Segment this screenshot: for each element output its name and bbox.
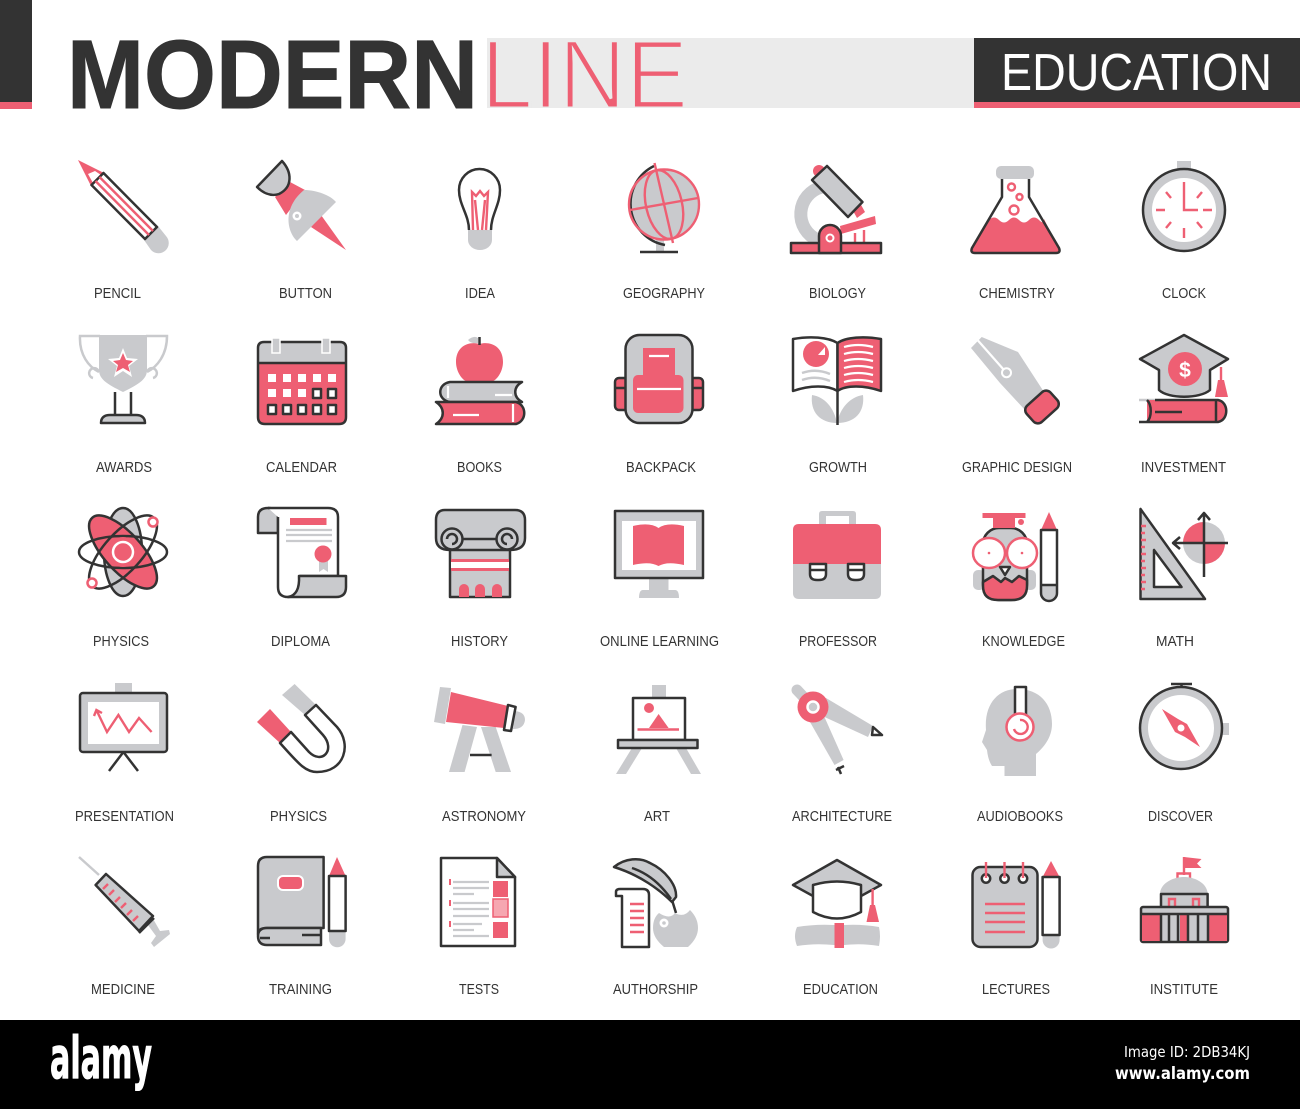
label: investment: INVESTMENT <box>1141 460 1226 476</box>
label: physics magnet: PHYSICS <box>270 809 327 825</box>
footer image id: Image ID: 2DB34KJ <box>1124 1043 1250 1061</box>
label: math: MATH <box>1156 634 1194 650</box>
cell: knowledge <box>973 512 1065 650</box>
icon: atom <box>78 505 168 599</box>
title band with LINE <box>487 38 974 108</box>
cell: awards <box>80 335 167 476</box>
label: medicine: MEDICINE <box>91 982 155 998</box>
cell: growth <box>793 337 881 476</box>
cell: institute <box>1141 857 1228 998</box>
cell: calendar <box>258 338 346 476</box>
icon: stopwatch <box>1143 161 1225 251</box>
cell: physics magnet <box>257 684 345 825</box>
icon: notebook with pencil <box>972 861 1060 948</box>
cell: investment <box>1139 335 1228 476</box>
cell: architecture <box>792 690 892 825</box>
cell: history <box>436 510 525 650</box>
cell: pencil <box>78 160 169 302</box>
icon: trophy <box>80 335 167 423</box>
label: graphic design: GRAPHIC DESIGN <box>962 460 1072 476</box>
icon: telescope <box>434 687 525 772</box>
cell: math <box>1140 509 1228 650</box>
label: clock: CLOCK <box>1162 286 1206 302</box>
label: presentation: PRESENTATION <box>75 809 174 825</box>
cell: authorship <box>613 859 698 998</box>
icon: backpack <box>615 335 703 423</box>
icon: capitol building <box>1141 857 1228 942</box>
icon: briefcase <box>793 511 881 599</box>
label: awards: AWARDS <box>96 460 152 476</box>
label: knowledge: KNOWLEDGE <box>982 634 1065 650</box>
icon: set square and chart <box>1140 509 1228 599</box>
icon: globe <box>629 163 699 252</box>
label: art: ART <box>644 809 670 825</box>
icon: cap and diploma <box>793 860 881 948</box>
icon: monitor with book <box>615 511 703 598</box>
cell: chemistry <box>971 166 1060 302</box>
cell: clock <box>1143 161 1225 302</box>
icon: graduation cap and book: $ <box>1179 359 1191 382</box>
icon: light bulb <box>459 169 500 250</box>
label: physics atom: PHYSICS <box>93 634 149 650</box>
title: MODERN: MODERN <box>67 20 478 129</box>
label: button: BUTTON <box>279 286 332 302</box>
label: pencil: PENCIL <box>94 286 141 302</box>
icon: column <box>436 510 525 597</box>
icon: quill and scroll <box>614 859 698 947</box>
icon: graduation cap and book <box>1139 335 1228 422</box>
icon: magnet <box>257 684 345 772</box>
label: calendar: CALENDAR <box>266 460 337 476</box>
icon: open book with leaves <box>793 337 881 425</box>
cell: physics atom <box>78 505 168 650</box>
header corner block <box>0 0 32 109</box>
label: idea: IDEA <box>465 286 495 302</box>
label: architecture: ARCHITECTURE <box>792 809 892 825</box>
icon: diploma scroll <box>258 508 346 597</box>
label: backpack: BACKPACK <box>626 460 696 476</box>
icon: compass divider <box>797 690 882 774</box>
icon: apple on books <box>436 337 524 424</box>
icon: compass <box>1140 684 1229 769</box>
title band with LINE: LINE <box>481 20 688 129</box>
cell: training <box>258 857 346 998</box>
label: online learning: ONLINE LEARNING <box>600 634 719 650</box>
icon: head with headphones <box>982 687 1052 776</box>
label: authorship: AUTHORSHIP <box>613 982 698 998</box>
cell: lectures <box>972 861 1060 998</box>
icon: calendar <box>258 338 346 424</box>
label: training: TRAINING <box>269 982 332 998</box>
cell: online learning <box>600 511 719 650</box>
label: chemistry: CHEMISTRY <box>979 286 1055 302</box>
cell: idea <box>459 169 500 302</box>
cell: discover <box>1140 684 1229 825</box>
cell: diploma <box>258 508 346 650</box>
cell: art <box>616 685 701 825</box>
label: lectures: LECTURES <box>982 982 1050 998</box>
label: geography: GEOGRAPHY <box>623 286 705 302</box>
footer logo: alamy: alamy <box>50 1024 152 1092</box>
footer bar <box>0 1020 1300 1109</box>
label: history: HISTORY <box>451 634 508 650</box>
icon: presentation board <box>80 683 167 771</box>
icon: easel <box>616 685 701 774</box>
label: growth: GROWTH <box>809 460 867 476</box>
label: institute: INSTITUTE <box>1150 982 1218 998</box>
header banner <box>0 0 1300 110</box>
category tag: EDUCATION: EDUCATION <box>1001 44 1272 102</box>
cell: professor <box>793 511 881 650</box>
icon: flask <box>971 166 1060 253</box>
cell: biology <box>791 165 881 302</box>
cell: tests <box>441 858 515 998</box>
cell: geography <box>623 163 705 302</box>
cell: books <box>436 337 524 476</box>
icon: pen nib <box>971 337 1061 426</box>
cell: medicine <box>79 857 170 998</box>
label: astronomy: ASTRONOMY <box>442 809 526 825</box>
footer url: www.alamy.com <box>1115 1064 1250 1084</box>
cell: audiobooks <box>977 687 1063 825</box>
cell: graphic design <box>962 337 1072 476</box>
cell: button <box>257 161 346 302</box>
label: tests: TESTS <box>459 982 499 998</box>
cell: presentation <box>75 683 174 825</box>
icon: owl with pencil <box>973 512 1057 601</box>
icon: syringe <box>79 857 170 947</box>
label: books: BOOKS <box>457 460 502 476</box>
cell: education <box>793 860 881 998</box>
icon: pencil <box>78 160 169 253</box>
label: diploma: DIPLOMA <box>271 634 330 650</box>
icon: microscope <box>791 165 881 253</box>
label: biology: BIOLOGY <box>809 286 866 302</box>
cell: astronomy <box>434 687 526 825</box>
cell: backpack <box>615 335 703 476</box>
icon: book with pencil <box>258 857 346 947</box>
label: education: EDUCATION <box>803 982 878 998</box>
icon: test paper <box>441 858 515 946</box>
label: audiobooks: AUDIOBOOKS <box>977 809 1063 825</box>
label: discover: DISCOVER <box>1148 809 1213 825</box>
label: professor: PROFESSOR <box>799 634 877 650</box>
icon: push pin <box>257 161 346 250</box>
